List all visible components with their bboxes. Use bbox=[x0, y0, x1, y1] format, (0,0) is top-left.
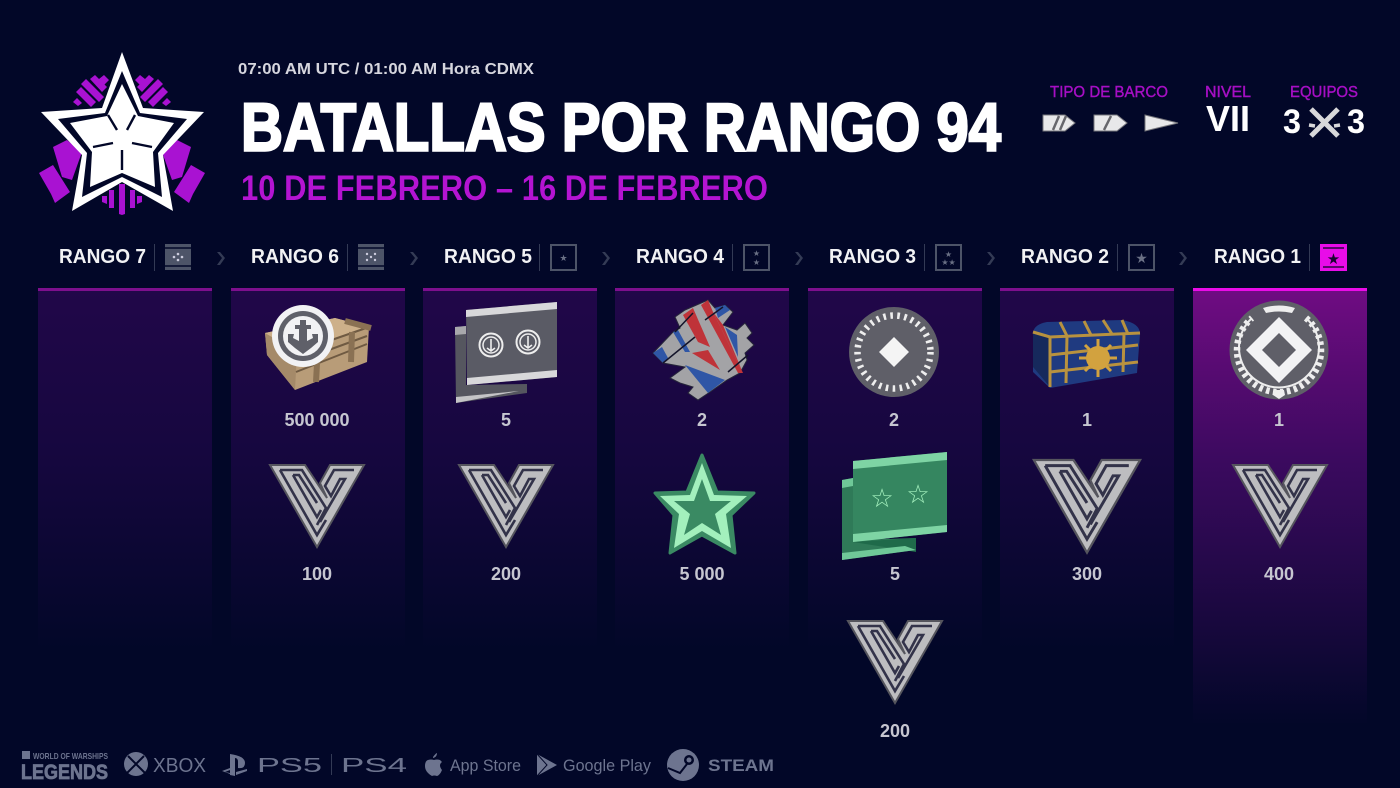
info: ship type: TIPO DE BARCO bbox=[1050, 84, 1168, 101]
chevron bbox=[1179, 252, 1187, 265]
info: ship type bbox=[1043, 84, 1178, 131]
amount: 5 000 bbox=[679, 564, 725, 584]
chevron bbox=[987, 252, 995, 265]
panel: rank 4 bbox=[615, 288, 789, 651]
rank header 2: RANGO 2 bbox=[1021, 246, 1109, 268]
reward: V emblem bbox=[270, 465, 364, 547]
rank header 7 bbox=[59, 244, 191, 271]
reward: green signal flags: ☆ bbox=[906, 479, 930, 509]
info: teams: EQUIPOS bbox=[1290, 84, 1358, 101]
info: teams bbox=[1283, 84, 1365, 141]
footer: PlayStation: PS4 bbox=[341, 755, 407, 777]
reward: V emblem large bbox=[1034, 460, 1140, 553]
rank header 4 bbox=[636, 244, 769, 271]
amount: 300 bbox=[1072, 564, 1102, 584]
info: teams: 3 bbox=[1347, 103, 1365, 141]
reward: signal coin bbox=[849, 307, 939, 397]
rank header 7: RANGO 7 bbox=[59, 246, 146, 268]
rank header 1 bbox=[1214, 244, 1347, 271]
rank header 3: RANGO 3 bbox=[829, 246, 916, 268]
rank header 2: ★ bbox=[1135, 250, 1148, 266]
rank header 2 bbox=[1021, 244, 1154, 271]
reward: grey signal flags bbox=[455, 302, 557, 403]
chevron bbox=[795, 252, 803, 265]
reward: laurel emblem bbox=[1230, 300, 1328, 400]
reward: green star bbox=[655, 455, 754, 553]
info: tier: VII bbox=[1206, 98, 1250, 139]
reward: green signal flags: ☆ bbox=[870, 483, 894, 513]
footer: Legends logo: WORLD OF WARSHIPS bbox=[33, 751, 108, 761]
info: teams: 3 bbox=[1283, 103, 1301, 141]
rank header 3: ★★ bbox=[941, 258, 956, 267]
rank header 6 bbox=[251, 244, 384, 271]
info: tier: NIVEL bbox=[1205, 84, 1251, 101]
rank header 5: RANGO 5 bbox=[444, 246, 532, 268]
rank header 3 bbox=[829, 244, 961, 271]
logo: star emblem bbox=[39, 52, 205, 215]
time line: 07:00 AM UTC / 01:00 AM Hora CDMX bbox=[238, 61, 534, 78]
reward: green signal flags bbox=[842, 452, 947, 560]
footer: Xbox: XBOX bbox=[153, 755, 206, 777]
amount: 1 bbox=[1274, 410, 1284, 430]
reward: V emblem bbox=[1233, 465, 1327, 547]
footer: Steam: STEAM bbox=[708, 757, 774, 775]
amount: 2 bbox=[697, 410, 707, 430]
reward: V emblem bbox=[459, 465, 553, 547]
amount: 400 bbox=[1264, 564, 1294, 584]
footer: PlayStation: PS5 bbox=[257, 755, 322, 777]
chevron bbox=[602, 252, 610, 265]
rank header 6: RANGO 6 bbox=[251, 246, 339, 268]
amount: 5 bbox=[501, 410, 511, 430]
panel: rank 6 bbox=[231, 288, 405, 651]
title: BATALLAS POR RANGO 94 bbox=[241, 90, 1001, 166]
panel: rank 2 bbox=[1000, 288, 1174, 651]
rank header 5 bbox=[444, 244, 576, 271]
footer: Google Play: Google Play bbox=[563, 757, 652, 775]
panel: rank 7 bbox=[38, 288, 212, 651]
footer: Xbox bbox=[124, 752, 206, 777]
chevron bbox=[410, 252, 418, 265]
reward: V emblem bbox=[848, 621, 942, 703]
chevron bbox=[217, 252, 225, 265]
amount: 200 bbox=[491, 564, 521, 584]
reward: camouflage bbox=[653, 300, 754, 400]
amount: 5 bbox=[890, 564, 900, 584]
rank header 3: ★ bbox=[945, 250, 952, 259]
footer: App Store bbox=[425, 753, 521, 776]
amount: 200 bbox=[880, 721, 910, 741]
rank header 1: ★ bbox=[1327, 251, 1340, 268]
reward: blue chest bbox=[1033, 320, 1140, 388]
panel: rank 5 bbox=[423, 288, 597, 651]
footer: PlayStation bbox=[222, 754, 407, 777]
footer: Legends logo: LEGENDS bbox=[21, 761, 108, 784]
footer: Legends logo bbox=[21, 751, 108, 784]
rank header 1: RANGO 1 bbox=[1214, 246, 1301, 268]
reward: crate of credits bbox=[265, 305, 371, 390]
amount: 100 bbox=[302, 564, 332, 584]
panel: rank 3 bbox=[808, 288, 982, 741]
amount: 2 bbox=[889, 410, 899, 430]
panel: rank 1 bbox=[1193, 288, 1367, 726]
footer: Steam bbox=[667, 749, 774, 781]
footer: App Store: App Store bbox=[450, 757, 521, 775]
amount: 500 000 bbox=[284, 410, 350, 430]
rank header 4: RANGO 4 bbox=[636, 246, 725, 268]
dates subtitle: 10 DE FEBRERO – 16 DE FEBRERO bbox=[241, 169, 768, 208]
rank header 4: ★ bbox=[753, 258, 760, 267]
amount: 1 bbox=[1082, 410, 1092, 430]
rank header 4: ★ bbox=[753, 249, 760, 258]
footer: Google Play bbox=[537, 754, 652, 776]
rank header 5: ★ bbox=[559, 253, 568, 263]
